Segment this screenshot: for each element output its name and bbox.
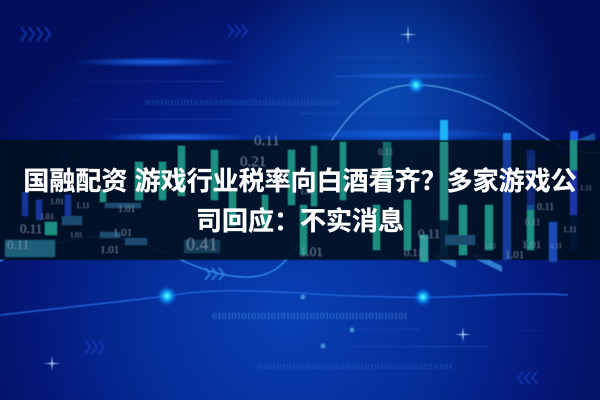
small number labels: 1.11 xyxy=(580,184,592,192)
dark band xyxy=(0,140,600,260)
small number labels: 1.01 xyxy=(522,239,541,251)
small number labels: 1.01 xyxy=(100,244,119,256)
glow streaks xyxy=(70,57,510,142)
title: 司回应：不实消息 xyxy=(196,206,404,236)
green bars xyxy=(45,140,577,262)
bars above band xyxy=(435,120,595,272)
binary text rows: 0101010101010101010101010101010101010101 xyxy=(257,362,453,371)
title: 国融配资 游戏行业税率向白酒看齐？多家游戏公 xyxy=(23,166,577,196)
small number labels xyxy=(7,133,592,261)
small number labels: 0.11 xyxy=(254,133,280,149)
small number labels: 0.41 xyxy=(186,234,218,254)
small number labels: 1.01 xyxy=(118,204,136,215)
small number labels: 1.01 xyxy=(113,227,132,239)
title xyxy=(23,166,577,236)
small number labels: 1.01 xyxy=(50,197,64,206)
small number labels: 0.11 xyxy=(404,247,423,259)
small number labels: 1.01 xyxy=(385,221,399,230)
small number labels: 1.11 xyxy=(563,225,577,234)
binary text rows: 0101010101010101010101010101 xyxy=(60,251,195,260)
small number labels: 1.01 xyxy=(505,249,524,261)
curve lower xyxy=(0,237,300,277)
small number labels: 1.11 xyxy=(76,201,90,210)
small number labels: 1.01 xyxy=(484,242,497,250)
small number labels: 0.11 xyxy=(7,237,29,252)
small number labels: 0.11 xyxy=(20,221,42,236)
small number labels: 1.01 xyxy=(70,231,83,239)
small number labels: 0.11 xyxy=(378,147,393,157)
small number labels: 0.11 xyxy=(537,202,554,213)
binary text rows xyxy=(60,98,453,371)
small number labels: 0.21 xyxy=(240,154,266,170)
binary text rows: 0101010101010101010101010101010101010101 xyxy=(145,98,340,107)
small number labels: 1.01 xyxy=(300,244,323,259)
small number labels: 0.11 xyxy=(525,217,540,227)
glowing dots xyxy=(56,76,432,348)
small number labels: 1.11 xyxy=(550,242,562,250)
sparkles xyxy=(44,25,471,371)
small number labels: 0.11 xyxy=(418,226,440,241)
blue bars xyxy=(5,140,577,262)
binary text rows: 0101010101010101010101010101010101010101 xyxy=(212,311,408,321)
small number labels: 1.01 xyxy=(40,212,54,221)
faint horizontal lines xyxy=(25,58,560,346)
small number labels: 1.01 xyxy=(300,187,314,196)
chevrons xyxy=(21,25,537,384)
curve upper xyxy=(0,85,600,315)
